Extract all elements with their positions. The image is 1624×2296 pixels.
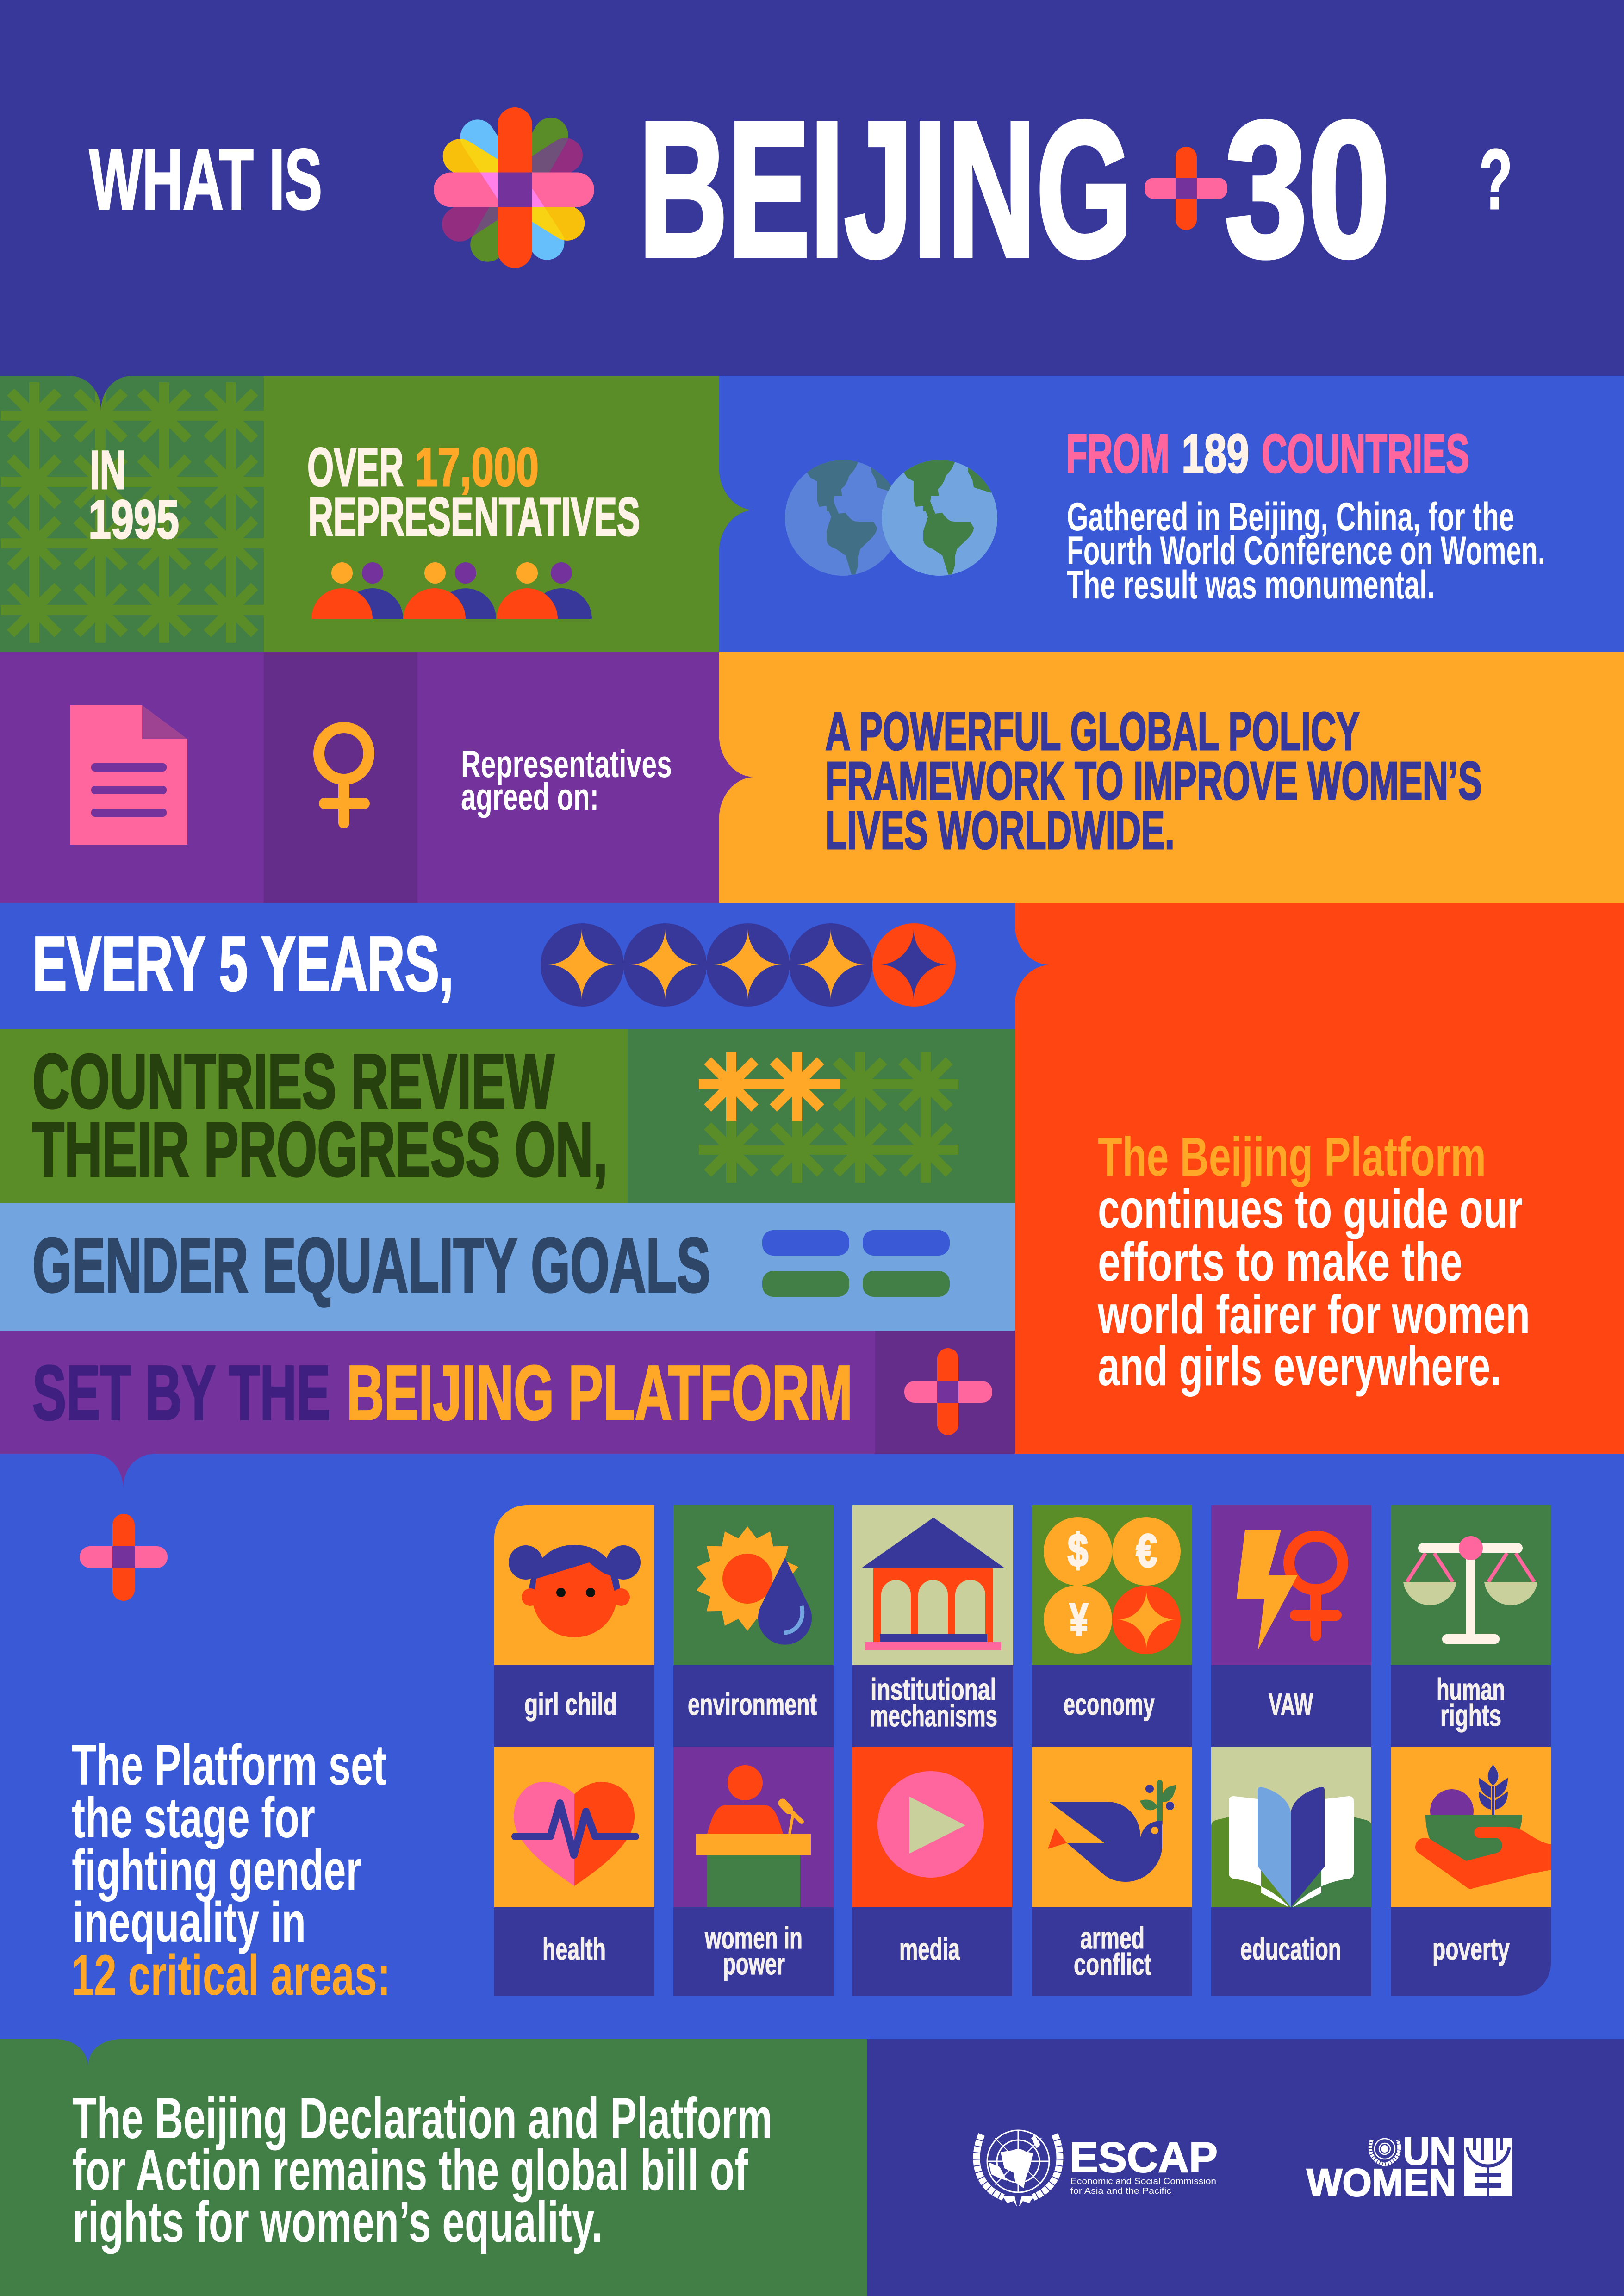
text: Beijing Declaration: The Beijing Declaration and Platform xyxy=(72,2086,772,2151)
tile: poverty xyxy=(1391,1747,1551,1996)
tile: armed conflict xyxy=(1032,1747,1192,1996)
icon: coins: $ xyxy=(1068,1524,1088,1576)
icon: coins: € xyxy=(1136,1525,1157,1577)
heading: from 189 countries: COUNTRIES xyxy=(1262,423,1469,485)
heading: from 189 countries: FROM xyxy=(1066,423,1170,485)
icon: open book xyxy=(1211,1787,1371,1907)
heading: from 189 countries xyxy=(1066,423,1469,485)
label: VAW: VAW xyxy=(1269,1687,1313,1721)
label: health: health xyxy=(542,1932,606,1966)
icon: heart with pulse xyxy=(514,1782,635,1886)
panel: global policy framework xyxy=(719,652,1624,903)
icon: coins: ¥ xyxy=(1070,1594,1088,1646)
text: powerful global policy: A POWERFUL GLOBAL POLICY xyxy=(825,701,1360,761)
text: the platform set the stage: 12 critical areas: xyxy=(71,1944,391,2007)
text: powerful global policy xyxy=(825,701,1482,860)
text: the platform set the stage: fighting gender xyxy=(72,1839,361,1902)
text: powerful global policy: LIVES WORLDWIDE. xyxy=(825,800,1175,860)
panel: in 1995 pattern xyxy=(0,376,264,652)
text: the platform set the stage: inequality in xyxy=(73,1891,306,1954)
text: over 17,000 representatives: OVER xyxy=(307,437,404,498)
icon: bolt and female symbol xyxy=(1237,1530,1343,1650)
label: women in power: women in xyxy=(704,1921,803,1955)
tile: women in power xyxy=(673,1747,834,1996)
panel: set by the Beijing Platform xyxy=(0,1331,1015,1454)
text: representatives agreed on: Representatives xyxy=(461,742,672,785)
panel: global bill of rights xyxy=(0,2039,867,2296)
tile: health xyxy=(494,1747,654,1996)
label: human rights: rights xyxy=(1440,1698,1501,1732)
icon: plus left xyxy=(80,1514,168,1601)
heading: 30: 30 xyxy=(1225,82,1390,297)
label: human rights: human xyxy=(1437,1672,1505,1706)
label: institutional mechanisms xyxy=(870,1672,997,1733)
text: gathered in Beijing: The result was monumental. xyxy=(1067,563,1435,607)
text: continues to guide: The Beijing Platform xyxy=(1098,1126,1486,1188)
panel: gender equality goals xyxy=(0,1203,1015,1331)
text: the platform set the stage: The Platform set xyxy=(72,1734,386,1797)
panel: framework document xyxy=(0,652,719,903)
icon: globes xyxy=(785,458,997,576)
panel: Beijing Platform continues xyxy=(1015,903,1624,1454)
label: armed conflict: armed xyxy=(1080,1921,1145,1955)
icon: hand with bowl and plant xyxy=(1415,1765,1551,1889)
label: institutional mechanisms: institutional xyxy=(871,1672,996,1706)
logo: UN Women xyxy=(1307,2129,1512,2204)
icon: equal pills xyxy=(762,1230,950,1297)
tile: VAW xyxy=(1211,1505,1371,1747)
label: women in power: power xyxy=(723,1947,785,1981)
icon: Beijing+30 flower logo xyxy=(434,107,594,268)
label: women in power xyxy=(704,1921,803,1981)
panel: 12 critical areas xyxy=(0,1454,1624,2039)
panel: from 189 countries xyxy=(719,376,1624,652)
tile: media xyxy=(852,1747,1012,1996)
tile: human rights xyxy=(1391,1505,1551,1747)
text: in 1995 xyxy=(88,440,179,550)
text: in 1995: 1995 xyxy=(88,489,179,550)
tile: girl child xyxy=(494,1505,654,1747)
text: set by the beijing platform: SET BY THE xyxy=(32,1350,330,1436)
tile: environment xyxy=(673,1505,834,1747)
icon: girl face xyxy=(509,1545,641,1637)
icon: dove xyxy=(1048,1780,1176,1882)
icon: scales xyxy=(1403,1536,1537,1644)
logo: ESCAP: for Asia and the Pacific xyxy=(1070,2186,1171,2196)
text: the platform set the stage: the stage for xyxy=(72,1786,315,1850)
logo: ESCAP: Economic and Social Commission xyxy=(1070,2177,1216,2186)
icon: people xyxy=(311,562,592,619)
label: human rights xyxy=(1437,1672,1505,1732)
icon: document xyxy=(70,705,187,845)
icon: plus xyxy=(904,1348,992,1435)
icon: UN Women symbol xyxy=(1464,2138,1512,2196)
text: continues to guide xyxy=(1097,1126,1530,1397)
logo: UN Women: WOMEN xyxy=(1307,2161,1456,2204)
icon: sun and water drop xyxy=(694,1526,812,1645)
text: representatives agreed on xyxy=(461,742,672,818)
icon: play button xyxy=(877,1771,984,1878)
text: over 17,000 representatives: REPRESENTATIVES xyxy=(308,486,640,548)
panel: every 5 years xyxy=(0,903,1015,1029)
text: Beijing Declaration xyxy=(72,2086,772,2254)
text: over 17,000 representatives xyxy=(307,437,640,548)
label: environment: environment xyxy=(688,1687,817,1721)
icon: five star circles xyxy=(541,923,956,1007)
logo: ESCAP xyxy=(977,2130,1218,2206)
label: armed conflict: conflict xyxy=(1074,1947,1151,1981)
tile: economy xyxy=(1032,1505,1192,1747)
label: economy: economy xyxy=(1064,1687,1155,1721)
heading: what is: WHAT IS xyxy=(89,132,322,227)
label: poverty: poverty xyxy=(1432,1932,1510,1966)
panel: countries review xyxy=(0,1029,1015,1203)
icon: female symbol xyxy=(319,728,369,823)
tile: institutional mechanisms xyxy=(852,1505,1013,1747)
icon: building xyxy=(861,1518,1005,1650)
text: set by the beijing platform: BEIJING PLATFORM xyxy=(347,1350,852,1436)
label: media: media xyxy=(899,1932,960,1966)
heading: question mark: ? xyxy=(1479,132,1512,227)
text: in 1995: IN xyxy=(90,440,126,501)
label: education: education xyxy=(1240,1932,1341,1966)
text: representatives agreed on: agreed on: xyxy=(461,775,599,818)
text: countries review their progress: THEIR PROGRESS ON, xyxy=(32,1107,608,1193)
icon: small plus xyxy=(1145,147,1227,230)
label: institutional mechanisms: mechanisms xyxy=(870,1699,997,1733)
text: Beijing Declaration: rights for women’s equality. xyxy=(72,2190,603,2254)
label: armed conflict xyxy=(1074,1921,1151,1981)
panel: header xyxy=(88,107,1510,268)
heading: every 5 years: EVERY 5 YEARS, xyxy=(32,921,454,1007)
logo: ESCAP: ESCAP xyxy=(1070,2134,1218,2181)
icon: speaker at podium xyxy=(696,1765,811,1907)
heading: from 189 countries: 189 xyxy=(1182,423,1249,485)
text: set by the beijing platform xyxy=(32,1350,852,1436)
text: continues to guide: efforts to make the xyxy=(1098,1231,1462,1293)
logo: UN Women: UN xyxy=(1403,2129,1456,2173)
text: gathered in Beijing xyxy=(1067,495,1545,607)
text: countries review their progress xyxy=(32,1039,608,1193)
text: gender equality goals: GENDER EQUALITY GOALS xyxy=(32,1222,710,1308)
panel: representatives xyxy=(264,376,719,652)
text: countries review their progress: COUNTRIES REVIEW xyxy=(32,1039,554,1125)
icon: asterisk progress pattern xyxy=(699,1052,958,1183)
text: the platform set the stage xyxy=(71,1734,391,2007)
text: Beijing Declaration: for Action remains the global bill of xyxy=(72,2138,748,2203)
text: over 17,000 representatives: 17,000 xyxy=(415,437,539,498)
label: girl child: girl child xyxy=(524,1687,617,1721)
heading: Beijing: BEIJING xyxy=(639,82,1132,297)
tile: education xyxy=(1211,1747,1371,1996)
icon: coins xyxy=(1044,1517,1181,1654)
panel: logos xyxy=(867,2039,1624,2296)
